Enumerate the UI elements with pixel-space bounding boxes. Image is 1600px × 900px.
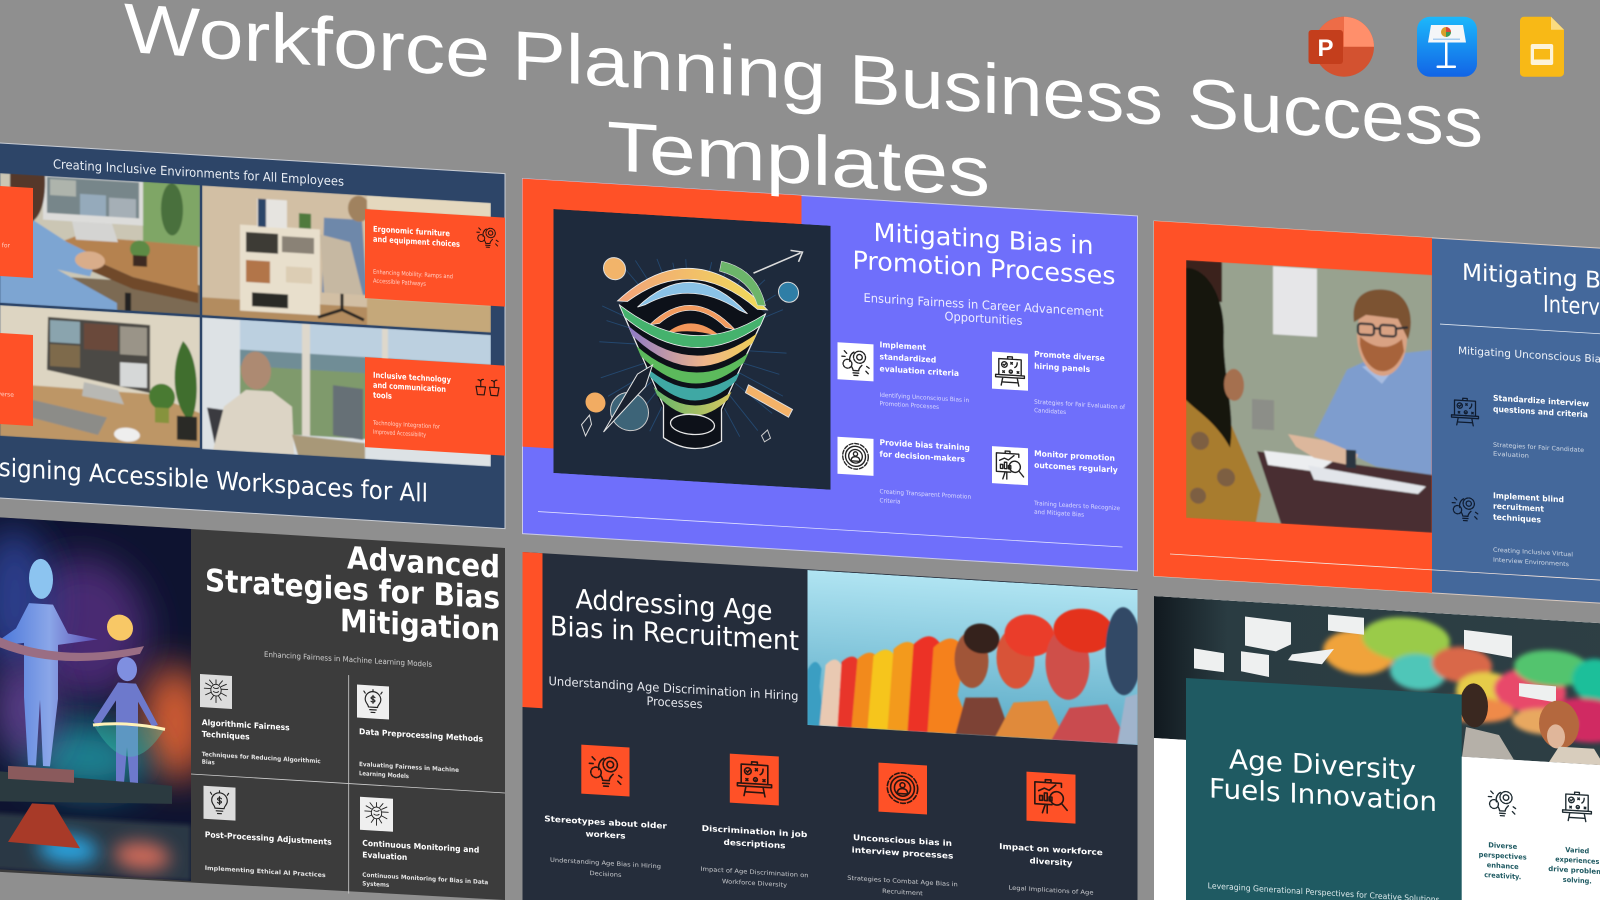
cell: data preprocessing bbox=[357, 685, 483, 785]
item: blind recruitment bbox=[1452, 489, 1573, 568]
panel: accessible workspaces slide bbox=[0, 136, 505, 529]
cell: post-processing bbox=[204, 786, 332, 880]
cell: continuous monitoring bbox=[360, 797, 488, 895]
heading: advanced strategies: Strategies for Bias bbox=[205, 563, 500, 617]
slide background bbox=[522, 179, 1138, 571]
item: blind recruitment: techniques bbox=[1493, 513, 1541, 525]
item: diverse panels: Promote diverse bbox=[1034, 350, 1105, 363]
item: standardized evaluation: standardized bbox=[880, 352, 936, 365]
subtitle: Understanding Age Discrimination in Hiring bbox=[548, 674, 798, 703]
panel: advanced strategies slide bbox=[0, 511, 505, 900]
column: stereotypes: Stereotypes about older bbox=[544, 814, 667, 831]
item: standardized evaluation: Promotion Processes bbox=[880, 400, 939, 411]
item: diverse panels: Candidates bbox=[1034, 407, 1066, 416]
floating objects bbox=[582, 256, 798, 449]
heading: addressing age bias bbox=[550, 583, 799, 657]
cell: algorithmic fairness: Algorithmic Fairness bbox=[202, 718, 290, 732]
cell: algorithmic fairness: Techniques for Reducing Algorithmic bbox=[202, 751, 321, 765]
orange stripe bbox=[522, 552, 542, 708]
icon: Google Slides bbox=[1520, 17, 1564, 77]
cell: post-processing: Implementing Ethical AI Practices bbox=[205, 865, 326, 879]
callout: inclusive technology: tools bbox=[373, 391, 392, 401]
title: Business bbox=[849, 40, 1163, 140]
callout: left bottom bbox=[0, 326, 33, 426]
callout: ergonomic furniture: Enhancing Mobility: Ramps and bbox=[373, 269, 453, 280]
callout: left top bbox=[0, 179, 33, 278]
heading: mitigating bias bbox=[852, 217, 1116, 291]
cell: algorithmic fairness: Techniques bbox=[202, 730, 250, 742]
column: unconscious bias: Strategies to Combat Age Bias in bbox=[847, 875, 958, 888]
column: job descriptions: descriptions bbox=[724, 838, 786, 850]
panel: mitigating bias in promotion bbox=[522, 179, 1138, 571]
subtitle bbox=[548, 674, 798, 717]
item: blind recruitment: recruitment bbox=[1493, 502, 1544, 514]
item: standardize interview: Evaluation bbox=[1493, 451, 1529, 460]
column: stereotypes: workers bbox=[585, 829, 626, 841]
column: workforce diversity: diversity bbox=[1030, 856, 1073, 868]
item: varied experiences: solving. bbox=[1563, 876, 1592, 886]
item: standardized evaluation: Implement bbox=[880, 340, 926, 352]
cell: post-processing: Post-Processing Adjustments bbox=[205, 830, 332, 847]
orange accent block bbox=[522, 179, 802, 464]
item: bias training: Creating Transparent Promotion bbox=[880, 488, 971, 501]
callout: ergonomic furniture bbox=[365, 209, 505, 307]
column: unconscious bias: Unconscious bias in bbox=[853, 833, 952, 848]
illustration: balance figures bbox=[0, 517, 191, 881]
callout: inclusive technology: Improved Accessibility bbox=[373, 429, 426, 439]
item: diverse perspectives: Diverse bbox=[1488, 841, 1517, 851]
photo: man at window with laptop bbox=[202, 317, 491, 467]
panel: age diversity slide bbox=[1154, 596, 1600, 900]
title: Success bbox=[1187, 64, 1483, 163]
cell: algorithmic fairness bbox=[200, 674, 321, 773]
tray and ball bbox=[0, 607, 144, 666]
platform and cone bbox=[0, 765, 172, 854]
column: unconscious bias: Recruitment bbox=[882, 888, 924, 897]
sticky notes bbox=[1194, 606, 1556, 702]
item: diverse panels: Strategies for Fair Evaluation of bbox=[1034, 399, 1126, 411]
item: standardized evaluation: evaluation criteria bbox=[880, 364, 959, 378]
item: diverse perspectives: perspectives bbox=[1479, 851, 1527, 862]
photo: shelves and office chair bbox=[202, 185, 491, 333]
photo: row of colourful heads bbox=[808, 570, 1138, 745]
heading: mitigating bias in interviews bbox=[1462, 260, 1600, 325]
slide background bbox=[0, 511, 505, 900]
item: varied experiences bbox=[1548, 791, 1600, 886]
title: Templates bbox=[607, 107, 990, 212]
column: workforce diversity: Impact on workforce bbox=[999, 842, 1103, 857]
item: standardized evaluation: Identifying Unconscious Bias in bbox=[880, 392, 969, 404]
item: diverse panels: hiring panels bbox=[1034, 362, 1090, 374]
cell: algorithmic fairness: Bias bbox=[202, 759, 215, 766]
cell: continuous monitoring: Evaluation bbox=[362, 850, 408, 862]
slide background bbox=[1154, 596, 1600, 900]
heading: advanced strategies: Mitigation bbox=[340, 603, 500, 649]
cell: data preprocessing: Learning Models bbox=[359, 770, 409, 780]
heading: creating inclusive environments: Creating Inclusive Environments for All Employees bbox=[53, 156, 344, 189]
teal title card: Age Diversity bbox=[1229, 745, 1416, 787]
cell: continuous monitoring: Continuous Monitoring for Bias in Data bbox=[362, 872, 488, 886]
callout: ergonomic furniture: Accessible Pathways bbox=[373, 278, 426, 288]
item: varied experiences: Varied bbox=[1565, 846, 1589, 855]
cell: continuous monitoring: Systems bbox=[362, 880, 390, 889]
item: standardize interview: questions and criteria bbox=[1493, 405, 1588, 419]
icon: bulb and gear bbox=[477, 227, 498, 248]
item: bias training: Provide bias training bbox=[880, 438, 970, 452]
item: diverse perspectives: enhance bbox=[1487, 861, 1519, 871]
item: blind recruitment: Implement blind bbox=[1493, 491, 1564, 504]
funnel body bbox=[618, 264, 768, 453]
callout: inclusive technology: Technology Integration for bbox=[372, 420, 440, 431]
arrow and arc bbox=[720, 246, 802, 308]
item: diverse perspectives: creativity. bbox=[1484, 871, 1521, 881]
photo: man at desktop with video call bbox=[0, 173, 200, 315]
column: stereotypes: Understanding Age Bias in Hiring bbox=[550, 857, 661, 870]
item: bias training: for decision-makers bbox=[880, 450, 965, 464]
column: stereotypes: Decisions bbox=[590, 870, 621, 879]
slide background bbox=[522, 552, 1138, 900]
heading: mitigating bias: Promotion Processes bbox=[852, 246, 1115, 291]
callout: inclusive technology: Inclusive technology bbox=[373, 371, 452, 384]
item: standardize interview: Strategies for Fair Candidate bbox=[1493, 442, 1584, 454]
subtitle bbox=[864, 291, 1104, 333]
item: standardized evaluation bbox=[838, 338, 969, 413]
icon: PowerPoint bbox=[1308, 17, 1374, 77]
heading: mitigating bias: Mitigating Bias in bbox=[874, 218, 1094, 260]
callout: left top: for bbox=[2, 242, 11, 250]
item: monitor outcomes: outcomes regularly bbox=[1034, 461, 1118, 475]
callout: ergonomic furniture: and equipment choices bbox=[373, 235, 460, 249]
teal title card: Fuels Innovation bbox=[1209, 773, 1437, 818]
cell: data preprocessing: Data Preprocessing Methods bbox=[359, 727, 483, 744]
panel: mitigating bias in interviews bbox=[1154, 221, 1600, 613]
subtitle: Ensuring Fairness in Career Advancement bbox=[864, 291, 1104, 319]
title bbox=[124, 0, 1483, 247]
subtitle: Processes bbox=[646, 694, 702, 711]
heading: addressing age bias: Bias in Recruitment bbox=[550, 611, 799, 657]
small figure bbox=[93, 655, 158, 785]
subtitle: Enhancing Fairness in Machine Learning Models bbox=[264, 650, 432, 669]
heading: advanced strategies bbox=[205, 532, 500, 649]
column: job descriptions: Workforce Diversity bbox=[722, 878, 787, 889]
slide background bbox=[0, 136, 505, 529]
column: job descriptions: Discrimination in job bbox=[702, 824, 808, 839]
icon: PowerPoint: P bbox=[1317, 35, 1334, 62]
icon: Keynote bbox=[1417, 17, 1477, 77]
photo: interview conversation bbox=[1186, 260, 1432, 533]
large figure bbox=[0, 556, 98, 769]
item: bias training: Criteria bbox=[880, 497, 901, 506]
item: standardize interview bbox=[1452, 391, 1590, 463]
cell: data preprocessing: Evaluating Fairness in Machine bbox=[359, 761, 459, 774]
item: monitor outcomes: Monitor promotion bbox=[1034, 449, 1115, 463]
photo: colourful map on chalkboard bbox=[1154, 596, 1600, 766]
column: workforce diversity: Legal Implications of Age bbox=[1008, 885, 1094, 897]
slide background bbox=[1154, 221, 1600, 613]
icon: plants bbox=[476, 379, 499, 396]
cell: continuous monitoring: Continuous Monitoring and bbox=[362, 839, 480, 855]
callout: ergonomic furniture: Ergonomic furniture bbox=[373, 225, 450, 238]
item: monitor outcomes: and Mitigate Bias bbox=[1034, 509, 1084, 519]
item: monitor outcomes: Training Leaders to Recognize bbox=[1033, 500, 1120, 512]
orange block bbox=[1154, 221, 1432, 593]
heading: addressing age bias: Addressing Age bbox=[576, 584, 772, 627]
teal title card bbox=[1186, 678, 1462, 900]
item: bias training bbox=[838, 435, 971, 510]
heading: advanced strategies: Advanced bbox=[347, 540, 500, 586]
item: standardize interview: Standardize interview bbox=[1493, 394, 1590, 408]
photo: monitor with video tiles bbox=[0, 305, 200, 448]
item: blind recruitment: Creating Inclusive Virtual bbox=[1493, 547, 1573, 558]
item: blind recruitment: Interview Environments bbox=[1493, 557, 1569, 568]
column: job descriptions bbox=[700, 752, 809, 890]
panel: addressing age bias slide bbox=[522, 552, 1142, 900]
column: stereotypes bbox=[544, 742, 667, 882]
callout: inclusive technology: and communication bbox=[373, 381, 446, 394]
callout: inclusive technology bbox=[365, 357, 505, 456]
glowing ring bbox=[93, 722, 165, 759]
illustration: colourful funnel bbox=[554, 209, 830, 490]
column: unconscious bias bbox=[847, 761, 958, 899]
people bbox=[1460, 683, 1600, 765]
item: diverse perspectives bbox=[1479, 790, 1527, 882]
column: job descriptions: Impact of Age Discrimination on bbox=[700, 866, 809, 879]
item: diverse panels bbox=[992, 347, 1126, 420]
column: workforce diversity bbox=[999, 770, 1103, 897]
item: monitor outcomes bbox=[992, 446, 1120, 521]
title: Planning bbox=[512, 16, 826, 116]
column: unconscious bias: interview processes bbox=[852, 845, 954, 861]
subtitle: Opportunities bbox=[944, 309, 1022, 328]
